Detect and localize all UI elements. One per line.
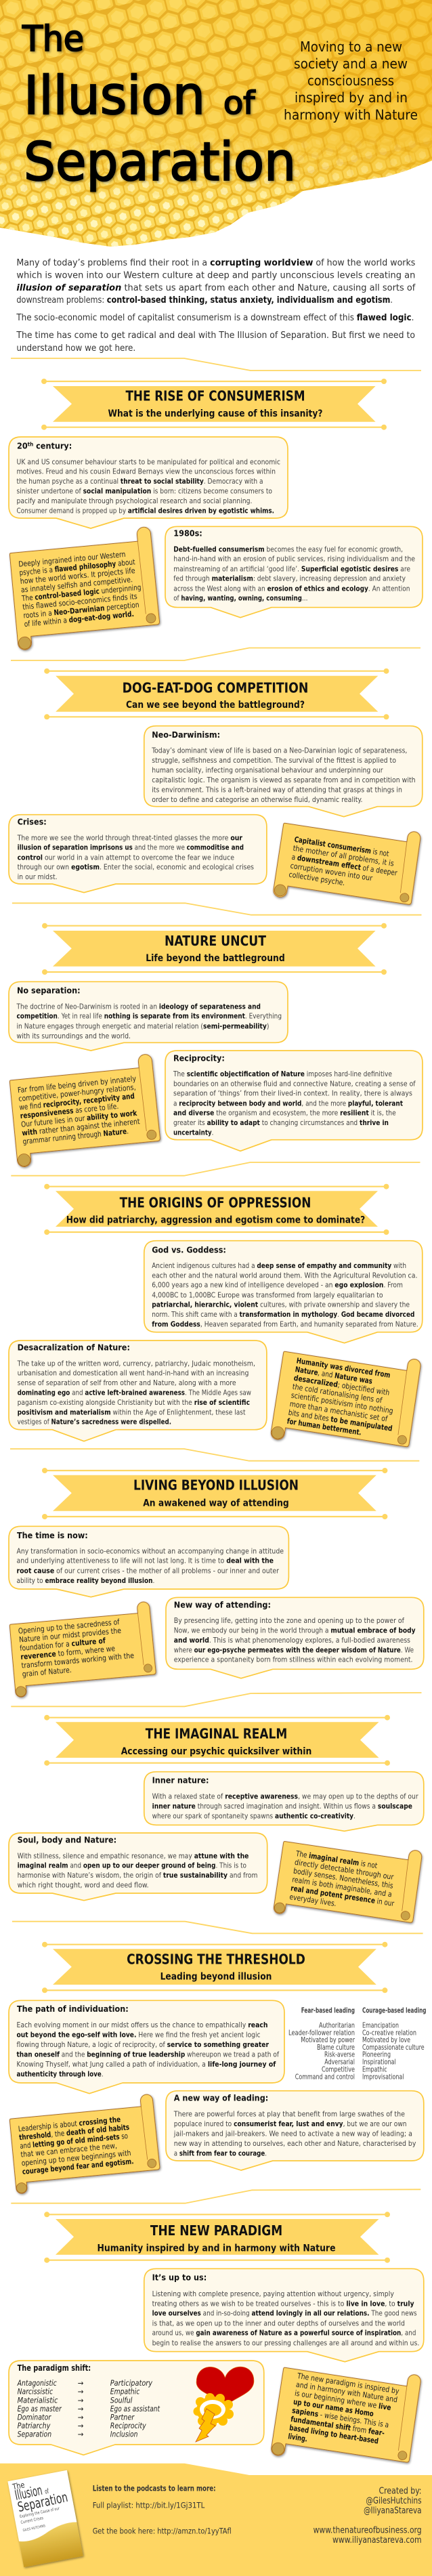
scroll: imaginal realm: everyday lives. [289,1893,337,1908]
scroll: reciprocity and receptivity: competitive, power-hungry relations, [18,1083,136,1103]
text: neo-darwinism body: order to define and categorise an otherwise fluid, dynamic reality. [152,795,362,804]
text: crises body: illusion of separation imprisons us and the more we commoditise and [18,843,244,852]
text: 20th century body [16,457,280,515]
section banner: dog-eat-dog competition: Can we see beyond the battleground? [126,700,305,711]
table: fear-based vs courage-based leading: Authoritarian [319,2022,355,2029]
scroll: reciprocity and receptivity: Far from life being driven by innately [17,1074,137,1095]
panel: the paradigm shift [9,2361,264,2455]
scroll: humanity divorced from nature: for human betterment. [286,1417,362,1437]
panel: desacralization of nature [9,1340,267,1441]
section banner: living beyond illusion: LIVING BEYOND ILLUSION [133,1477,299,1493]
arrows: paradigm shift: → [78,2395,84,2405]
table: fear-based vs courage-based leading: Compassionate culture [362,2044,425,2052]
text: soul, body and nature body [18,1851,257,1890]
text: new way of attending body: By presencing life, getting into the zone and opening up to the power of [174,1616,405,1625]
panel: inner nature [144,1772,424,1831]
section banner: nature uncut: Life beyond the battleground [146,953,285,964]
section banner: the rise of consumerism: THE RISE OF CONSUMERISM [126,388,305,404]
text: 1980s body: of having, wanting, owning, consuming… [173,594,307,603]
text: podcasts and book links: Full playlist: http://bit.ly/1Gj31TL [93,2501,205,2510]
arrows: paradigm shift [78,2378,84,2439]
intro text: downstream problems: control-based thinking, status anxiety, individualism and egotism. [16,295,393,305]
text: god vs goddess body: patriarchal, hierarchic, violent cultures, with private ownership and slavery the [152,1301,410,1309]
scroll: flawed philosophy: roots in a Neo-Darwinian perception [23,600,139,620]
panel: reciprocity [165,1051,423,1151]
section banner: living beyond illusion [42,1468,387,1519]
text: desacralization body: paganism co-existing alongside Christianity but with the rise of scientific [18,1398,250,1407]
text: desacralization body: sense of separation of self from other and Nature, along with a more [18,1378,236,1387]
scroll: reciprocity and receptivity: we find reciprocity, receptivity and [19,1092,135,1112]
arrows: paradigm shift: → [78,2421,84,2430]
panel: god vs goddess [144,1241,423,1343]
scroll: capitalist consumerism [273,812,422,917]
scroll: culture of reverence: foundation for a culture of [20,1637,106,1653]
table: fear-based vs courage-based leading: Blame culture [317,2044,355,2052]
icon: book cover: Current Crises [20,2516,44,2525]
table: fear-based vs courage-based leading: Co-creative relation [362,2029,416,2037]
text: god vs goddess body: 6,000 years ago a new kind of intelligence developed - an ego explosion. From [152,1281,403,1290]
text: 20th century body: the human psyche as a continual threat to social stability. Democracy with a [16,477,263,486]
text: 1980s body: mainstreaming of an artificial ‘good life’. Superficial egotistic desires are [173,564,410,573]
list: paradigm shift new values: Participatory [110,2378,153,2388]
title: The [22,19,84,60]
table: fear-based vs courage-based leading: Pioneering [362,2052,391,2059]
heading: a new way of leading: A new way of leading: [174,2093,268,2103]
scroll: the new paradigm: based living to heart-based [288,2424,379,2446]
text: neo-darwinism body: its environment. This is a left-brained way of attending that grasps at things in [152,785,402,794]
section banner: living beyond illusion: An awakened way of attending [143,1498,289,1508]
panel: 1980s [165,526,423,618]
heading: the paradigm shift: The paradigm shift: [18,2363,91,2373]
heading: the time is now: The time is now: [17,1530,88,1540]
icon: book cover: The [11,2480,26,2492]
list: paradigm shift old values: Antagonistic [17,2378,57,2388]
text: it's up to us body: begin to realise the answers to our pressing challenges are all around and within us. [152,2338,419,2347]
table: fear-based vs courage-based leading: Emancipation [362,2022,399,2029]
scroll: reciprocity and receptivity: Our future lies in our ability to work [20,1109,137,1129]
text: the time is now body: ability to embrace reality beyond illusion. [16,1576,154,1585]
section banner: the rise of consumerism [41,379,387,430]
text: 20th century body: Consumer demand is propped up by artificial desires driven by egotistic whims. [16,506,274,515]
scroll: humanity divorced from nature: bits and bites to be manipulated [288,1408,393,1433]
text: 20th century body: UK and US consumer behaviour starts to be manipulated for political and economic [16,457,280,466]
scroll: culture of reverence: transform towards working with the [21,1651,135,1670]
heading: god vs goddess: God vs. Goddess: [152,1244,226,1254]
text: inner nature body: inner nature through sacred imagination and insight. Within us flows a soulscape [152,1802,412,1811]
title: Illusion [24,66,205,127]
text: god vs goddess body: 4,000BC to 1,000BC Europe was transformed from largely equalitarian to [152,1290,383,1299]
text: crises body: The more we see the world through threat-tinted glasses the more our [17,833,242,842]
scroll: humanity divorced from nature: scientific positivism into nothing [290,1391,394,1416]
scroll: reciprocity and receptivity: with rather than against the inherent [22,1117,140,1137]
list: paradigm shift old values: Dominator [18,2413,51,2422]
text: 1980s body: hand-in-hand with an erosion of public services, rising individualism and the [173,555,415,564]
scroll: culture of reverence: Opening up to the sacredness of [18,1618,120,1636]
text: god vs goddess body [152,1261,418,1328]
text: god vs goddess body: norm. This shift came with a transformation in mythology. God became divorced [152,1310,414,1319]
text: new way of attending body: Now, we embody our being in the world through a mutual embrace of body [174,1626,416,1634]
scroll: crossing the threshold: that we can embrace the new, [20,2141,117,2159]
intro text: illusion of separation that sets us apart from each other and Nature, causing all sorts of [16,283,416,293]
text: neo-darwinism body: Today’s dominant view of life is based on a Neo-Darwinian logic of separateness, [151,746,407,755]
subtitle [284,39,418,123]
list: paradigm shift new values [110,2378,160,2439]
text: 1980s body: across the West along with an erosion of ethics and ecology. An attention [173,584,410,593]
scroll: flawed philosophy: psyche is a flawed philosophy about [19,557,135,577]
text: podcasts and book links [93,2483,232,2536]
list: paradigm shift old values [17,2378,62,2439]
text: creators and websites: Created by: [379,2487,421,2497]
section banner: the origins of oppression: THE ORIGINS OF OPPRESSION [120,1195,311,1211]
text: inner nature body: With a relaxed state of receptive awareness, we may open up to the depths of our [152,1792,418,1801]
text: the path of individuation body: authenticity through love. [16,2069,104,2078]
text: new way of attending body: where our ego-psyche permeates with the deeper wisdom of Nature. We [174,1645,414,1654]
scroll: flawed philosophy: as innately selfish and competitive. [20,575,133,595]
list: paradigm shift new values: Partner [110,2413,135,2422]
text: crises body: through our own egotism. Enter the social, economic and ecological crises [18,863,254,872]
text: desacralization body: urbanisation and domestication all went hand-in-hand with an increasing [18,1369,249,1378]
text: the path of individuation body: Knowing Thyself, what Jung called a path of individuation, a life-long journey of [16,2060,276,2069]
scroll: imaginal realm: bodily senses. Nonetheless, this [293,1867,394,1891]
heading: neo-darwinism: Neo-Darwinism: [152,730,220,740]
text: reciprocity body: greater its ability to adapt to changing circumstances and thrive in [173,1118,389,1127]
scroll: the new paradigm: fundamental shift from fear- [290,2415,385,2438]
scroll: humanity divorced from nature: Humanity was divorced from [296,1356,391,1380]
scroll: culture of reverence: reverence to form, where we [20,1644,115,1662]
text: soul, body and nature body: which right thought, word and deed flow. [18,1881,149,1890]
heading: 1980s: 1980s: [173,528,202,539]
text: no separation body: in Nature engages through energetic and material relation (semi-permeability) [16,1021,269,1030]
section banner: the imaginal realm: Accessing our psychic quicksilver within [121,1746,311,1757]
subtitle: inspired by and in [295,89,408,106]
heading: 20th century: th [28,442,33,448]
text: crises body [17,833,254,881]
heading: crises: Crises: [18,817,47,827]
section banner: the origins of oppression: How did patriarchy, aggression and egotism come to dominate? [66,1215,365,1226]
intro text: The socio-economic model of capitalist consumerism is a downstream effect of this flawed logic. [16,313,414,323]
text: soul, body and nature body: With stillness, silence and empathic resonance, we may attune with the [18,1851,249,1860]
subtitle: harmony with Nature [284,107,418,123]
icon: book cover: Exploring the Cause of our [19,2506,60,2519]
scroll: the new paradigm: sapiens - wise beings. This is a [291,2406,389,2430]
section banner: the rise of consumerism: What is the underlying cause of this insanity? [108,408,322,419]
text: soul, body and nature body: harmonise with Nature’s wisdom, the origin of true sustainability and from [18,1871,257,1880]
text: 1980s body: fed through materialism: debt slavery, increasing depression and anxiety [173,574,406,583]
text: podcasts and book links: Listen to the podcasts to learn more: [93,2483,216,2493]
section banner: nature uncut [42,923,387,975]
table: fear-based vs courage-based leading: Adversarial [324,2059,355,2067]
section banner: the imaginal realm: THE IMAGINAL REALM [146,1726,287,1742]
text: god vs goddess body: each other and the natural world around them. With the Agricultural Revolution ca. [152,1271,417,1280]
list: paradigm shift old values: Separation [18,2430,51,2439]
section banner: the new paradigm [44,2212,390,2263]
table: fear-based vs courage-based leading: Inspirational [362,2059,396,2067]
text: a new way of leading body: new way in attending to ourselves, each other and Nature, characterised by [174,2139,416,2148]
text: reciprocity body: and diverse the organism and ecosystem, the more resilient it is, the [173,1109,396,1118]
list: paradigm shift old values: Narcissistic [18,2387,53,2396]
heading: no separation: No separation: [17,986,81,996]
heading: it's up to us: It’s up to us: [152,2273,207,2283]
list: paradigm shift old values: Patriarchy [18,2421,51,2430]
panel: a new way of leading [166,2091,424,2170]
scroll: imaginal realm: directly detectable through our [294,1858,395,1882]
text: god vs goddess body: from Goddess, Heaven separated from Earth, and humanity separated from Nature. [152,1319,418,1328]
table: fear-based vs courage-based leading: Improvisational [362,2073,404,2081]
section banner: nature uncut: NATURE UNCUT [165,933,267,949]
text: reciprocity body: separation of ‘things’ from their lived-in context. In reality, there is always [173,1089,412,1098]
scroll: crossing the threshold [9,2094,161,2194]
table: fear-based vs courage-based leading: Command and control [295,2073,355,2081]
panel: the time is now [9,1526,288,1597]
scroll: humanity divorced from nature: desacralized; objectified with [293,1374,390,1397]
table: fear-based vs courage-based leading: Leader-follower relation [288,2029,355,2037]
heading: inner nature: Inner nature: [152,1775,209,1786]
heading: 20th century: 20 [17,441,28,451]
text: creators and websites [314,2487,422,2546]
list: paradigm shift new values: Inclusion [110,2430,138,2439]
icon: book cover: GILES HUTCHINS [22,2524,46,2533]
text: a new way of leading body: There are powerful forces at play that benefit from large swathes of the [173,2110,405,2119]
text: the time is now body: root cause of our current crises - the mother of all problems - our inner and outer [16,1566,279,1575]
section banner: dog-eat-dog competition: DOG-EAT-DOG COMPETITION [123,679,308,696]
icon: book cover: Illusion of [14,2480,50,2504]
scroll: capitalist consumerism: a downstream effect of a deeper [291,853,398,878]
text: new way of attending body [174,1616,416,1664]
panel: it's up to us [144,2268,424,2362]
section banner: dog-eat-dog competition [44,669,389,719]
text: desacralization body: positivism and materialism within the Age of Enlightenment, these last [18,1408,246,1416]
text: no separation body: competition. Yet in real life nothing is separate from its environment. Everything [16,1012,282,1021]
icon: book cover [7,2470,83,2567]
table: fear-based vs courage-based leading: Competitive [322,2066,355,2073]
panel: crises [9,815,267,893]
table: fear-based vs courage-based leading: Motivated by power [301,2037,355,2044]
panel: the path of individuation [9,2000,284,2094]
title: of [223,85,256,121]
text: the path of individuation body: out beyond the ego-self with love. Here we find the fresh yet ancient logic [16,2030,260,2039]
text: creators and websites: www.thenatureofbusiness.org [314,2525,422,2535]
text: creators and websites: @IliyanaStareva [364,2506,422,2516]
text: desacralization body [17,1359,255,1427]
footer [0,2464,432,2576]
text: the time is now body [16,1546,284,1585]
text: neo-darwinism body: human sociality, infecting organisational behaviour and underpinning our [152,765,383,774]
intro text: which is woven into our Western culture at deep and partly unconscious levels creating an [16,271,415,280]
text: podcasts and book links: Get the book here: http://amzn.to/1yyTAfl [93,2527,232,2536]
text: 1980s body: Debt-fuelled consumerism becomes the easy fuel for economic growth, [173,545,403,553]
scroll: the new paradigm: living. [287,2432,308,2444]
table: fear-based vs courage-based leading: Risk-averse [324,2052,355,2059]
subtitle: Moving to a new [300,39,402,55]
text: the path of individuation body: Each evolving moment in our midst offers us the chance to empathically reach [16,2021,268,2029]
text: a new way of leading body: populace inured to consumerist fear, lust and envy, but we are our own [174,2119,407,2128]
text: it's up to us body [152,2289,419,2347]
table: fear-based vs courage-based leading [288,2008,427,2081]
text: it's up to us body: is that, as we open up to the inner and outer depths of ourselves and the world [152,2319,405,2327]
text: neo-darwinism body: capitalistic logic. The organism is viewed as separate from and in competition with [152,776,416,784]
icon: heart and lightning [194,2367,254,2442]
text: inner nature body: where our spark of spontaneity spawns authentic co-creativity. [152,1811,355,1820]
text: god vs goddess body: Ancient indigenous cultures had a deep sense of empathy and community with [152,1261,406,1270]
text: new way of attending body: experience a spontaneity born from stillness within each evolving moment. [174,1655,413,1664]
section banner: the origins of oppression [44,1184,389,1235]
text: 20th century body: pacify and manipulate through psychological research and social planning. [16,497,252,505]
title [22,19,296,193]
text: neo-darwinism body: struggle, selfishness and competition. The survival of the fittest is applied to [152,756,396,765]
scroll: culture of reverence [9,1601,157,1697]
scroll: capitalist consumerism: the mother of all problems, it is [293,844,395,868]
text: no separation body [16,1002,282,1040]
scroll: flawed philosophy: The control-based logic underpinning [21,583,142,603]
text: the path of individuation body: flowing through Nature, a logic of reciprocity, of service to something greater [16,2040,269,2049]
section banner: crossing the threshold [42,1942,387,1993]
arrows: paradigm shift: → [78,2413,84,2422]
scroll: the new paradigm: is our beginning where we live [294,2389,392,2412]
heading: soul, body and nature: Soul, body and Nature: [18,1835,116,1845]
text: creators and websites: www.iliyanastareva.com [332,2535,422,2546]
scroll: imaginal realm: real and potent presence in our [290,1884,395,1908]
title: Separation [24,132,296,193]
text: the path of individuation body: than oneself and the beginning of true leadership whereupon we tread a path of [16,2050,280,2059]
table: fear-based vs courage-based leading: Motivated by love [362,2037,410,2044]
panel: soul, body and nature [9,1833,267,1901]
scroll: flawed philosophy [8,526,161,650]
text: it's up to us body: Listening with complete presence, paying attention without urgency, simply [152,2289,394,2298]
scroll: the new paradigm: and in harmony with Nature and [295,2380,398,2405]
arrows: paradigm shift: → [78,2430,84,2439]
text: desacralization body: dominating ego and active left-brained awareness. The Middle Ages saw [18,1389,251,1397]
scroll: culture of reverence: Nature in our midst provides the [19,1626,122,1644]
scroll: reciprocity and receptivity: grammar running through Nature. [22,1127,129,1146]
list: paradigm shift new values: Reciprocity [110,2421,146,2430]
list: paradigm shift new values: Soulful [110,2395,133,2405]
text: reciprocity body: a reciprocity between body and world, and the more playful, tolerant [173,1099,403,1107]
text: reciprocity body: boundaries on an otherwise fluid and connective Nature, creating a sense of [173,1079,416,1088]
scroll: flawed philosophy: Deeply ingrained into our Western [18,550,126,569]
text: a new way of leading body [173,2110,416,2157]
scroll: reciprocity and receptivity: responsiveness as core to life. [20,1102,119,1120]
section banner: crossing the threshold: Leading beyond illusion [160,1972,272,1983]
text: the path of individuation body [16,2021,280,2078]
scroll: flawed philosophy: this flawed socio-economics finds its [22,592,137,612]
text: crises body: in our midst. [18,872,58,881]
subtitle: society and a new [294,56,408,72]
scroll: crossing the threshold: opening up to new beginnings with [21,2149,131,2168]
scroll: culture of reverence: grain of Nature. [22,1666,72,1678]
intro text: Many of today’s problems find their root in a corrupting worldview of how the world works [16,258,415,268]
heading: desacralization: Desacralization of Nature: [18,1342,130,1352]
text: creators and websites: @GilesHutchins [366,2496,422,2506]
text: 1980s body [173,545,415,603]
scroll: humanity divorced from nature: Nature, and Nature was [295,1365,373,1386]
heading: 20th century: century: [33,441,72,451]
arrows: paradigm shift: → [78,2404,84,2413]
text: 20th century body: sinister undertone of social manipulation is born: citizens become consumers to [16,487,272,496]
panel: new way of attending [166,1597,424,1678]
scroll: the new paradigm: up to our name as Homo [293,2397,374,2418]
scroll: crossing the threshold: Leadership is about crossing the [18,2115,121,2134]
section banner: the imaginal realm [44,1715,390,1766]
text: the time is now body: Any transformation in socio-economics without an accompanying change in attitude [16,1546,284,1555]
scroll: crossing the threshold: and letting go of old mind-sets so [20,2132,129,2151]
text: it's up to us body: around us, we gain awareness of Nature as a powerful source of inspiration, and [152,2329,416,2338]
text: no separation body: with its surroundings and the world. [16,1032,131,1040]
scroll: the new paradigm [270,2355,422,2475]
scroll: capitalist consumerism: corruption woven into our [290,862,374,883]
subtitle: consciousness [307,72,394,89]
text: a new way of leading body: jail-makers and jail-breakers. We need to activate a new way of leading; a [173,2129,412,2138]
intro text: The time has come to get radical and deal with The Illusion of Separation. But first we need to [16,331,415,341]
text: reciprocity body [173,1070,416,1137]
list: paradigm shift new values: Ego as assistant [110,2404,160,2413]
scroll: imaginal realm: realm is both imaginable, and a [291,1875,393,1899]
scroll: reciprocity and receptivity [8,1054,162,1167]
section banner: the new paradigm: Humanity inspired by and in harmony with Nature [98,2243,336,2254]
text: desacralization body: The take up of the written word, currency, patriarchy, Judaic monotheism, [17,1359,255,1368]
text: 20th century body: motives. Freud and his cousin Edward Bernays view the unconscious forces within [16,467,276,476]
heading: reciprocity: Reciprocity: [173,1053,225,1063]
scroll: the new paradigm: The new paradigm is inspired by [296,2371,399,2396]
scroll: capitalist consumerism: collective psyche. [288,870,345,887]
arrows: paradigm shift: → [78,2387,84,2396]
intro text: understand how we got here. [16,343,135,354]
text: soul, body and nature body: imaginal realm and open up to our deeper ground of being. This is to [18,1861,246,1870]
text: no separation body: The doctrine of Neo-Darwinism is rooted in an ideology of separateness and [16,1002,261,1011]
list: paradigm shift old values: Ego as master [18,2404,62,2413]
text: desacralization body: vestiges of Nature’s sacredness were dispelled. [18,1418,171,1427]
scroll: flawed philosophy: of life within a dog-eat-dog world. [24,610,134,629]
text: a new way of leading body: a shift from fear to courage. [174,2149,267,2157]
section banner: crossing the threshold: CROSSING THE THRESHOLD [127,1951,305,1967]
scroll: imaginal realm: The imaginal realm is not [295,1849,378,1870]
list: paradigm shift new values: Empathic [110,2387,140,2396]
scroll: humanity divorced from nature: the cold rationalising lens of [292,1382,383,1405]
text: the time is now body: and underlying attentiveness to life will not last long. It is time to deal with the [16,1557,274,1565]
section banner: the new paradigm: THE NEW PARADIGM [150,2222,282,2239]
arrows: paradigm shift: → [78,2378,84,2388]
scroll: humanity divorced from nature [270,1339,422,1460]
text: reciprocity body: The scientific objectification of Nature imposes hard-line definitive [173,1070,392,1078]
text: neo-darwinism body [151,746,416,804]
scroll: flawed philosophy: how the world works. It projects life [20,566,135,586]
intro text [16,258,416,354]
text: crises body: control our world in a vain attempt to overcome the fear we induce [18,853,234,862]
text: it's up to us body: treating others as we wish to be treated ourselves - this is to live in love, to truly [152,2299,414,2308]
text: it's up to us body: love ourselves and in-so-doing attend lovingly in all our relations. The good news [152,2309,417,2318]
scroll: imaginal realm [273,1831,423,1933]
icon: book cover: Separation [16,2489,69,2515]
text: reciprocity body: uncertainty. [173,1128,213,1137]
scroll: humanity divorced from nature: more than a mechanistic set of [289,1399,389,1424]
heading: new way of attending: New way of attending: [174,1599,271,1609]
text: new way of attending body: and world. This is what phenomenology explores, a full-bodied awareness [174,1636,410,1645]
list: paradigm shift old values: Materialistic [18,2395,58,2405]
scroll: capitalist consumerism: Capitalist consumerism is not [294,835,389,858]
table: fear-based vs courage-based leading: Empathic [362,2066,387,2073]
table: fear-based vs courage-based leading: Fear-based leading [301,2008,355,2015]
scroll: crossing the threshold: courage beyond fear and egotism. [22,2157,134,2176]
heading: the path of individuation: The path of individuation: [17,2004,129,2014]
scroll: crossing the threshold: threshold, the death of old habits [19,2123,130,2142]
text: inner nature body [152,1792,418,1820]
panel: neo-darwinism [144,726,423,817]
panel: no separation [9,981,288,1051]
header: honeycomb image [0,0,432,251]
panel: 20th century [9,437,288,528]
